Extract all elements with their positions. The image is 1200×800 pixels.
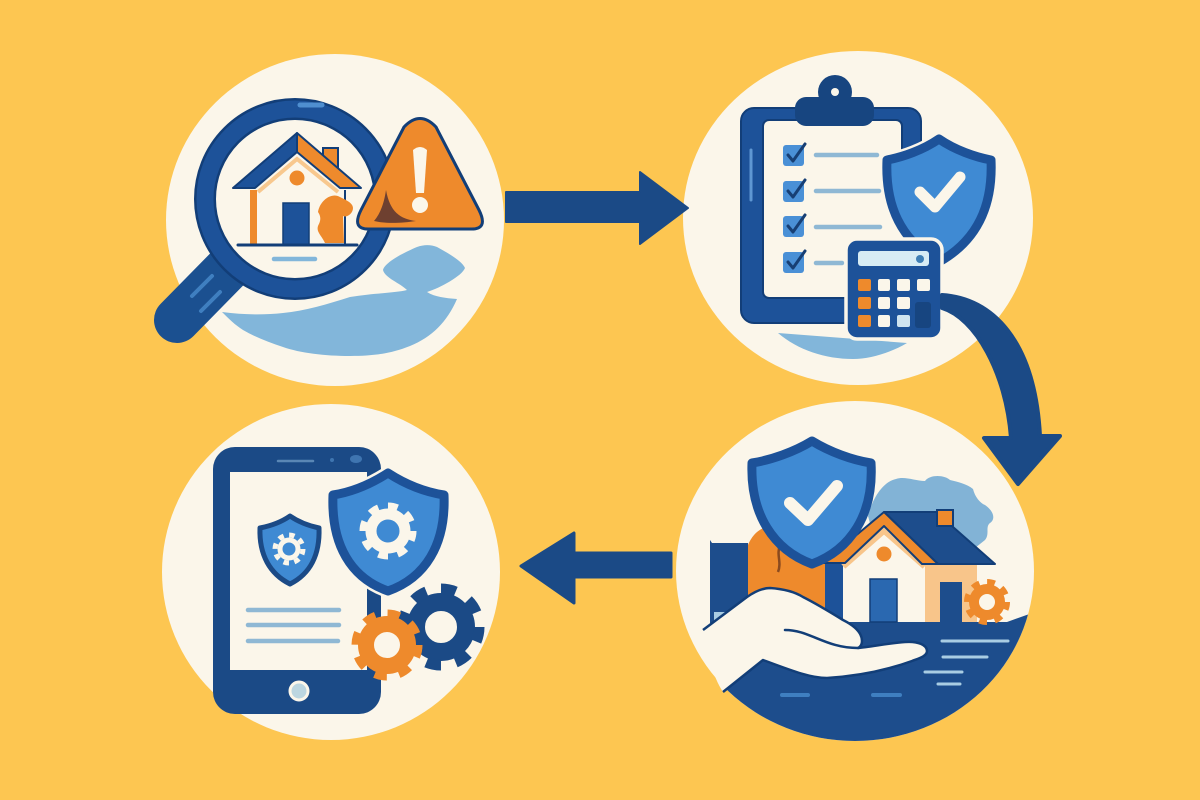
icon: clipboard xyxy=(741,75,921,323)
icon: shield with check xyxy=(887,139,991,262)
water dashes xyxy=(782,693,900,697)
icon: magnifying glass handle xyxy=(177,264,232,320)
panel: checklist and cost xyxy=(683,51,1033,385)
icon: small orange gear xyxy=(967,582,1007,622)
hand outline xyxy=(703,588,927,692)
icon: sleeve and orange hand xyxy=(710,526,825,623)
icon: shield with check xyxy=(752,441,871,564)
icon: house xyxy=(823,510,995,622)
checklist items xyxy=(783,144,880,273)
panel: protected home xyxy=(676,401,1040,760)
panel: mobile management xyxy=(162,404,500,740)
icon: smartphone xyxy=(213,447,381,714)
water landscape xyxy=(222,245,465,356)
arrow: step 2 to step 3 xyxy=(942,295,1060,484)
gear cloud background xyxy=(868,476,993,560)
icon: magnifying glass lens xyxy=(205,105,385,289)
icon: open hand xyxy=(703,588,927,692)
icon: small shield with gear xyxy=(260,516,319,584)
process infographic xyxy=(154,51,1062,741)
icon: navy gear xyxy=(390,589,479,665)
icon: large shield with gear xyxy=(333,473,444,591)
document lines xyxy=(248,610,339,641)
icon: warning triangle xyxy=(358,118,482,229)
water ripples xyxy=(925,641,1008,684)
arrow: step 3 to step 4 xyxy=(521,533,671,603)
water accent xyxy=(778,333,907,359)
icon: orange gear xyxy=(356,614,418,676)
icon: calculator xyxy=(846,239,942,339)
arrow: step 1 to step 2 xyxy=(506,172,688,244)
hand finger line xyxy=(785,630,858,648)
water and ground xyxy=(727,614,1028,741)
icon: house with damage xyxy=(233,133,361,259)
panel: risk inspection xyxy=(166,54,504,386)
